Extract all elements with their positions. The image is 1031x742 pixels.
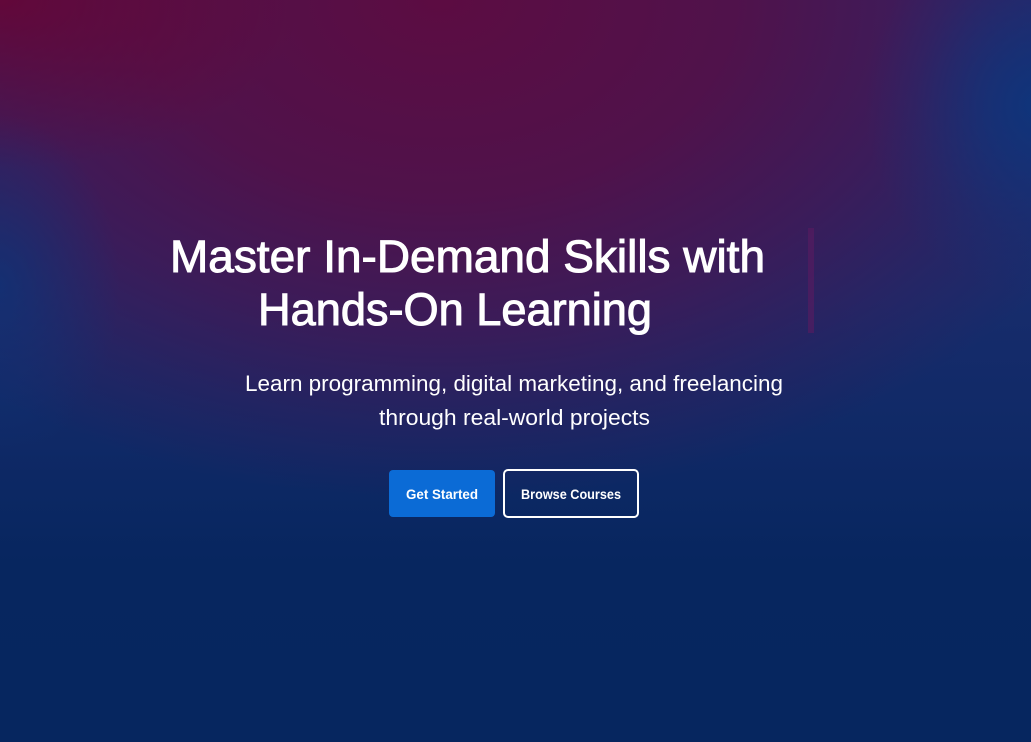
subtitle: through real-world projects <box>379 405 650 430</box>
button: browse courses: Browse Courses <box>521 486 621 502</box>
vertical accent bar <box>808 228 814 333</box>
subtitle: Learn programming, digital marketing, and freelancing <box>245 371 783 396</box>
button: browse courses <box>504 470 638 517</box>
button: get started <box>389 470 495 517</box>
title <box>170 231 765 335</box>
title: Master In-Demand Skills with <box>170 231 765 282</box>
subtitle <box>245 371 783 430</box>
title: Hands-On Learning <box>258 284 652 335</box>
button: get started: Get Started <box>406 486 478 502</box>
